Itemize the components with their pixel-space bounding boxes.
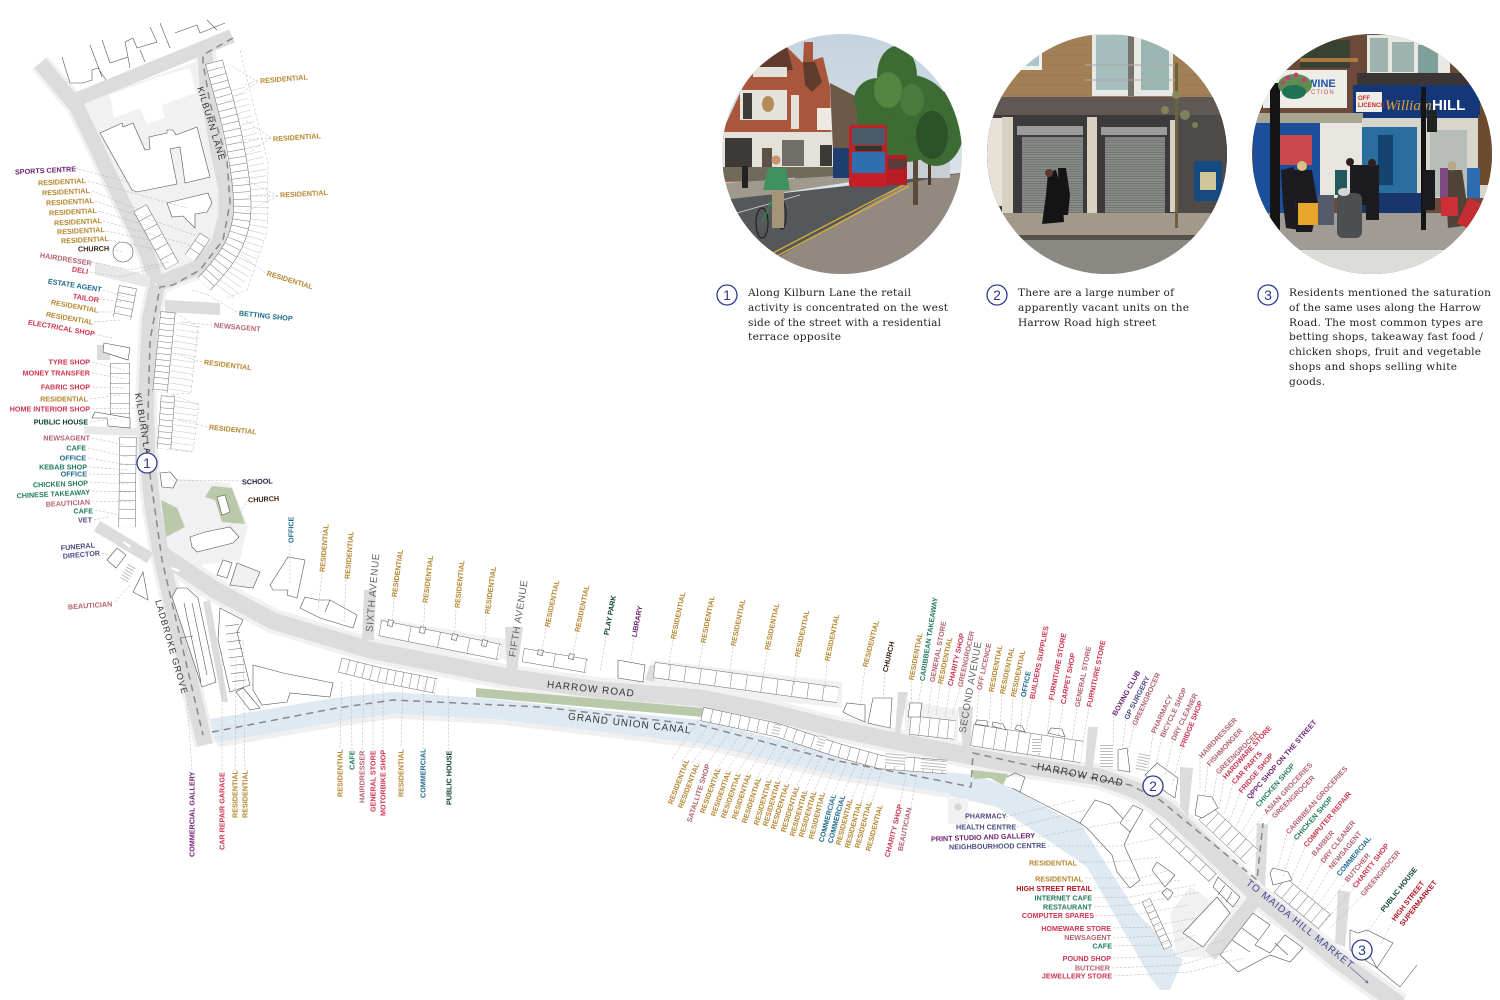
labels: Harrow Road north west: PLAY PARK: [602, 594, 618, 636]
labels: Harrow Road north west: RESIDENTIAL: [390, 548, 405, 598]
labels: Kilburn Lane west: RESIDENTIAL: [38, 176, 87, 187]
labels: Maida Hill north side: CHARITY SHOP: [1350, 841, 1391, 890]
labels: Kilburn Lane west: NEWSAGENT: [43, 434, 91, 442]
labels: Kilburn Lane west: RESIDENTIAL: [50, 298, 100, 315]
labels: south of canal: RESIDENTIAL: [1035, 874, 1084, 884]
labels: Maida Hill north side: HARDWARE STORE: [1221, 724, 1274, 781]
labels: Harrow Road north west: RESIDENTIAL: [421, 554, 435, 604]
labels: Ladbroke Grove and Harrow Road south: MOTORBIKE SHOP: [378, 750, 388, 816]
labels: south of canal: [931, 812, 1112, 980]
labels: Maida Hill north side: FISHMONGER: [1205, 726, 1245, 768]
labels: canal side terrace: RESIDENTIAL: [698, 766, 723, 815]
caption 3: of the same uses along the Harrow: [1289, 302, 1481, 314]
caption 1: [717, 285, 949, 343]
labels: canal side terrace: RESIDENTIAL: [740, 775, 763, 824]
labels: Maida Hill north side: GREENGROCER: [1214, 729, 1261, 776]
street names: [133, 86, 1356, 972]
labels: Kilburn Lane east: SCHOOL: [242, 476, 273, 486]
labels: Maida Hill north side: FRIDGE SHOP: [1237, 751, 1275, 795]
map marker 1: 1: [143, 455, 151, 471]
photo 3: Harrow Road saturated shopfronts: LICENCE: [1358, 103, 1384, 109]
labels: Harrow Road north west: RESIDENTIAL: [343, 530, 356, 579]
labels: Harrow Road north west: RESIDENTIAL: [763, 602, 781, 651]
labels: south of canal: PRINT STUDIO AND GALLERY: [931, 831, 1035, 843]
labels: Ladbroke Grove and Harrow Road south: RESIDENTIAL: [230, 769, 240, 818]
labels: canal side terrace: RESIDENTIAL: [779, 784, 801, 833]
labels: Kilburn Lane west: TYRE SHOP: [48, 358, 90, 366]
labels: Maida Hill north side: BUTCHER: [1343, 851, 1373, 884]
pavements: [75, 62, 1217, 957]
photo 3: Harrow Road saturated shopfronts: WINE: [1307, 78, 1336, 90]
labels: Harrow Road north east: GP SURGERY: [1122, 674, 1152, 721]
labels: Ladbroke Grove and Harrow Road south: HAIRDRESSER: [358, 750, 366, 803]
labels: Ladbroke Grove and Harrow Road south: COMMERCIAL GALLERY: [188, 771, 196, 857]
road label: To Maida Hill Market: TO MAIDA HILL MARKET: [1244, 878, 1356, 972]
labels: Maida Hill north side: QPPC SHOP ON THE STREET: [1245, 718, 1319, 801]
buildings: junction, school and church: [92, 343, 357, 710]
labels: canal side terrace: RESIDENTIAL: [676, 761, 702, 810]
labels: canal side terrace: RESIDENTIAL: [752, 777, 774, 826]
caption number 1: 1: [723, 287, 731, 303]
labels: canal side terrace: SATALLITE SHOP: [685, 763, 712, 823]
labels: canal side terrace: RESIDENTIAL: [807, 791, 827, 840]
photo 2: vacant shop units: [987, 30, 1227, 280]
caption number 3: [1258, 285, 1278, 305]
pub building: [722, 42, 833, 182]
labels: Kilburn Lane west: RESIDENTIAL: [46, 196, 95, 207]
caption number 2: [987, 285, 1007, 305]
labels: south of canal: HOMEWARE STORE: [1041, 924, 1111, 933]
labels: Ladbroke Grove and Harrow Road south: RESIDENTIAL: [396, 748, 406, 797]
labels: Maida Hill north side: NEWSAGENT: [1327, 829, 1364, 871]
labels: Harrow Road north east: GENERAL STORE: [1073, 645, 1093, 708]
labels: Harrow Road north east: BOXING CLUB: [1110, 669, 1142, 717]
photo 3: Harrow Road saturated shopfronts: William: [1385, 98, 1432, 114]
red bus: [849, 125, 907, 187]
terraces along Kilburn Lane: [120, 62, 242, 527]
labels: Maida Hill north side: GREENGROCER: [1270, 773, 1317, 820]
labels: Kilburn Lane west: RESIDENTIAL: [40, 394, 89, 404]
labels: Kilburn Lane west: OFFICE: [61, 470, 87, 478]
map marker 3: 3: [1358, 942, 1366, 958]
labels: Kilburn Lane east: RESIDENTIAL: [273, 131, 322, 143]
labels: Maida Hill north side: COMPUTER REPAIR: [1302, 789, 1354, 849]
labels: Harrow Road north east: RESIDENTIAL: [936, 636, 954, 685]
labels: Kilburn Lane west: RESIDENTIAL: [57, 225, 106, 236]
labels: Maida Hill north side: PUBLIC HOUSE: [1378, 865, 1419, 914]
labels: Kilburn Lane west: FABRIC SHOP: [41, 382, 90, 392]
labels: Maida Hill north side: [1197, 715, 1439, 928]
labels: Harrow Road north east: FURNITURE STORE: [1047, 632, 1068, 701]
street tree: [854, 46, 964, 166]
labels: Harrow Road north east: CARIBBEAN TAKEAWAY: [918, 596, 940, 682]
labels: Ladbroke Grove and Harrow Road south: RESIDENTIAL: [336, 748, 344, 797]
labels: Harrow Road north east: FRIDGE SHOP: [1178, 699, 1205, 749]
labels: Kilburn Lane west: RESIDENTIAL: [42, 186, 91, 197]
labels: Kilburn Lane east: BETTING SHOP: [239, 309, 293, 323]
labels: Kilburn Lane east: [203, 72, 329, 504]
caption 3: goods.: [1289, 376, 1325, 388]
labels: Harrow Road north west: RESIDENTIAL: [729, 598, 747, 647]
buildings: Harrow Road north: [340, 628, 1082, 767]
labels: Kilburn Lane east: NEWSAGENT: [214, 321, 262, 334]
labels: canal side terrace: RESIDENTIAL: [853, 800, 874, 849]
labels: south of canal: NEWSAGENT: [1064, 933, 1112, 942]
photo 1: Kilburn Lane street scene: [722, 34, 964, 280]
labels: Kilburn Lane east: RESIDENTIAL: [203, 358, 253, 372]
labels: south of canal: HEALTH CENTRE: [956, 822, 1016, 832]
white plots inside the upper block: [110, 68, 196, 124]
photo 3: Harrow Road saturated shopfronts: [1252, 34, 1493, 280]
labels: Kilburn Lane west: OFFICE: [60, 454, 86, 462]
photo 3: Harrow Road saturated shopfronts: HILL: [1432, 97, 1465, 114]
labels: south of canal: BUTCHER: [1075, 964, 1111, 972]
caption number 3: 3: [1264, 287, 1272, 303]
road label: Harrow Road west: HARROW ROAD: [546, 680, 635, 700]
labels: canal side terrace: [666, 757, 914, 858]
labels: Ladbroke Grove and Harrow Road south: PUBLIC HOUSE: [444, 750, 454, 805]
labels: canal side terrace: RESIDENTIAL: [730, 771, 753, 820]
labels: Kilburn Lane west: RESIDENTIAL: [45, 310, 95, 327]
labels: Maida Hill north side: ASIAN GROCERIES: [1262, 760, 1314, 816]
labels: canal side terrace: BEAUTICIAN: [896, 807, 914, 852]
road label: Ladbroke Grove: LADBROKE GROVE: [153, 599, 190, 696]
labels: Ladbroke Grove and Harrow Road south: RESIDENTIAL: [240, 769, 250, 818]
labels: Kilburn Lane west: MONEY TRANSFER: [23, 368, 91, 378]
labels: Maida Hill north side: CHICKEN SHOP: [1292, 794, 1335, 842]
caption 3: Residents mentioned the saturation: [1289, 287, 1491, 299]
caption 2: There are a large number of: [1018, 287, 1175, 299]
labels: Harrow Road north east: GREENGROCER: [956, 629, 976, 688]
labels: canal side terrace: RESIDENTIAL: [761, 778, 783, 827]
green spaces: [161, 486, 1008, 785]
canal basin marker: [954, 803, 962, 811]
labels: Maida Hill north side: GREENGROCER: [1359, 848, 1403, 898]
labels: Harrow Road north east: GENERAL STORE: [928, 620, 948, 683]
caption 2: Harrow Road high street: [1018, 317, 1157, 329]
labels: Maida Hill north side: SUPERMARKET: [1397, 878, 1439, 928]
labels: south of canal: NEIGHBOURHOOD CENTRE: [949, 841, 1046, 851]
caption 3: betting shops, takeaway fast food /: [1289, 331, 1483, 343]
map marker 3: [1352, 940, 1372, 960]
caption 1: side of the street with a residential: [748, 317, 942, 329]
junction traffic islands: [123, 541, 180, 586]
labels: canal side terrace: RESIDENTIAL: [709, 769, 733, 817]
labels: canal side terrace: RESIDENTIAL: [769, 781, 791, 830]
labels: Kilburn Lane west: RESIDENTIAL: [49, 206, 98, 217]
road label: Kilburn Lane upper: KILBURN LANE: [195, 86, 227, 162]
labels: Kilburn Lane east: RESIDENTIAL: [280, 188, 329, 199]
road label: Second Avenue: SECOND AVENUE: [958, 640, 985, 734]
labels: canal side terrace: COMMERCIAL: [817, 792, 838, 843]
map marker 1: [137, 453, 157, 473]
labels: Maida Hill north side: HAIRDRESSER: [1197, 715, 1240, 760]
caption number 1: [717, 285, 737, 305]
labels: Kilburn Lane west: HOME INTERIOR SHOP: [10, 404, 90, 414]
labels: Harrow Road north east: RESIDENTIAL: [987, 644, 1005, 693]
labels: Harrow Road north west: CHURCH: [881, 641, 896, 673]
labels: Harrow Road north east: PHARMACY: [1149, 693, 1175, 735]
caption 1: activity is concentrated on the west: [748, 302, 949, 314]
labels: canal side terrace: COMMERCIAL: [826, 793, 847, 844]
labels: Harrow Road north east: CARPET SHOP: [1059, 652, 1077, 705]
labels: Kilburn Lane west: SPORTS CENTRE: [15, 164, 76, 176]
labels: Kilburn Lane west: FUNERAL: [60, 540, 96, 552]
labels: south of canal: HIGH STREET RETAIL: [1016, 884, 1093, 893]
buildings: Kilburn Lane north block: [62, 20, 225, 262]
labels: Harrow Road north east: OFFICE: [1019, 670, 1033, 698]
labels: Ladbroke Grove and Harrow Road south: [188, 748, 454, 857]
caption 2: [987, 285, 1189, 329]
labels: Harrow Road north west: RESIDENTIAL: [793, 609, 811, 658]
labels: Harrow Road north west: RESIDENTIAL: [543, 579, 561, 628]
terrace: Kilburn Lane east rear plots: [222, 50, 268, 298]
arrow: towards Maida Hill Market: [1350, 967, 1368, 983]
labels: Kilburn Lane west: ESTATE AGENT: [47, 277, 103, 294]
caption 1: terrace opposite: [748, 331, 841, 343]
labels: Maida Hill north side: BARBER: [1310, 828, 1337, 858]
labels: Harrow Road north west: RESIDENTIAL: [453, 559, 467, 608]
labels: Kilburn Lane west: CAFE: [73, 506, 93, 516]
caption number 2: 2: [993, 287, 1001, 303]
labels: Kilburn Lane west: [10, 164, 113, 611]
canal: Grand Union Canal water: [205, 692, 1183, 990]
caption 3: [1258, 285, 1491, 388]
labels: Ladbroke Grove and Harrow Road south: GENERAL STORE: [368, 750, 378, 812]
road label: Harrow Road east: HARROW ROAD: [1036, 762, 1125, 789]
labels: Kilburn Lane east: RESIDENTIAL: [260, 72, 309, 85]
cyclist: [756, 155, 790, 238]
map marker 2: [1143, 776, 1163, 796]
labels: Maida Hill north side: COMMERCIAL: [1335, 834, 1374, 878]
labels: Harrow Road north east: BUILDERS SUPPLIES: [1028, 625, 1051, 700]
labels: canal side terrace: RESIDENTIAL: [797, 789, 819, 838]
labels: Kilburn Lane west: DELI: [71, 265, 89, 276]
labels: Kilburn Lane west: CHICKEN SHOP: [33, 478, 88, 489]
caption 3: Road. The most common types are: [1289, 317, 1483, 329]
labels: Kilburn Lane west: TAILOR: [72, 292, 100, 305]
labels: Harrow Road north east: FURNITURE STORE: [1085, 639, 1108, 708]
labels: south of canal: INTERNET CAFE: [1034, 894, 1092, 902]
buildings: Harrow Road rear extensions and blocks: [387, 620, 1178, 823]
labels: Harrow Road north west: RESIDENTIAL: [699, 595, 717, 644]
labels: Kilburn Lane west: HAIRDRESSER: [39, 251, 93, 268]
labels: Kilburn Lane west: RESIDENTIAL: [54, 216, 103, 227]
buildings: south of Harrow Road and Maida Hill: [1146, 813, 1325, 948]
road label: Kilburn Lane lower: KILBURN LANE: [133, 392, 155, 470]
labels: Harrow Road north west: [286, 516, 896, 673]
labels: Harrow Road north west: RESIDENTIAL: [861, 619, 881, 668]
labels: Harrow Road north east: [907, 596, 1205, 749]
labels: Harrow Road north east: CHARITY SHOP: [946, 632, 967, 687]
labels: Kilburn Lane west: RESIDENTIAL: [61, 234, 110, 245]
labels: canal side terrace: RESIDENTIAL: [666, 757, 692, 806]
labels: Harrow Road north east: OFF LICENCE: [975, 642, 993, 691]
caption 3: chicken shops, fruit and vegetable: [1289, 346, 1481, 358]
road centre dashes: [147, 38, 1263, 880]
labels: Kilburn Lane east: RESIDENTIAL: [266, 269, 315, 291]
labels: south of canal: PHARMACY: [965, 812, 1007, 820]
road label: Grand Union Canal: GRAND UNION CANAL: [567, 712, 692, 737]
labels: south of canal: COMPUTER SPARES: [1022, 911, 1094, 920]
labels: Maida Hill north side: DRY CLEANER: [1318, 818, 1358, 865]
labels: Kilburn Lane east: RESIDENTIAL: [209, 423, 258, 437]
labels: Harrow Road north west: OFFICE: [286, 516, 296, 543]
labels: Ladbroke Grove and Harrow Road south: COMMERCIAL: [418, 748, 428, 798]
caption 2: apparently vacant units on the: [1018, 302, 1189, 314]
labels: canal side terrace: CHARITY SHOP: [883, 803, 905, 858]
labels: Maida Hill north side: CAR PARTS: [1230, 749, 1264, 786]
labels: Harrow Road north east: RESIDENTIAL: [1009, 649, 1027, 698]
labels: Harrow Road north west: RESIDENTIAL: [573, 584, 591, 633]
labels: canal side terrace: RESIDENTIAL: [788, 788, 810, 837]
labels: Ladbroke Grove and Harrow Road south: CAR REPAIR GARAGE: [218, 772, 226, 850]
labels: Harrow Road north east: RESIDENTIAL: [907, 632, 925, 681]
labels: south of canal: RESTAURANT: [1043, 902, 1093, 912]
labels: Maida Hill north side: HIGH STREET: [1389, 879, 1427, 923]
labels: canal side terrace: RESIDENTIAL: [864, 803, 885, 852]
labels: Kilburn Lane west: ELECTRICAL SHOP: [27, 318, 96, 338]
road label: Sixth Avenue: SIXTH AVENUE: [365, 553, 382, 632]
labels: Kilburn Lane west: KEBAB SHOP: [39, 462, 87, 472]
labels: Kilburn Lane east: CHURCH: [248, 494, 279, 504]
labels: Kilburn Lane west: DIRECTOR: [62, 548, 101, 561]
labels: Ladbroke Grove and Harrow Road south: CAFE: [348, 750, 356, 770]
labels: Harrow Road north west: RESIDENTIAL: [823, 613, 841, 662]
labels: Kilburn Lane west: BEAUTICIAN: [68, 599, 113, 611]
labels: Kilburn Lane west: CAFE: [66, 444, 86, 452]
labels: canal side terrace: RESIDENTIAL: [834, 797, 855, 846]
labels: Harrow Road north west: RESIDENTIAL: [669, 591, 687, 640]
labels: south of canal: POUND SHOP: [1063, 954, 1111, 963]
labels: Kilburn Lane west: BEAUTICIAN: [45, 498, 90, 509]
labels: canal side terrace: RESIDENTIAL: [843, 800, 864, 849]
labels: Kilburn Lane west: CHURCH: [78, 244, 109, 253]
labels: south of canal: RESIDENTIAL: [1029, 858, 1078, 868]
photo 3: Harrow Road saturated shopfronts: OFF: [1358, 96, 1370, 102]
labels: Kilburn Lane west: VET: [78, 516, 93, 524]
labels: canal side terrace: RESIDENTIAL: [719, 771, 743, 819]
photo 3: Harrow Road saturated shopfronts: CTION: [1311, 90, 1335, 96]
labels: Harrow Road north east: BICYCLE SHOP: [1158, 686, 1189, 739]
buildings: south block outlines: [1080, 795, 1417, 987]
labels: Maida Hill north side: CHICKEN SHOP: [1254, 761, 1297, 809]
labels: Harrow Road north east: RESIDENTIAL: [998, 646, 1016, 695]
road label: Fifth Avenue: FIFTH AVENUE: [508, 579, 531, 658]
labels: Kilburn Lane west: PUBLIC HOUSE: [34, 418, 88, 426]
labels: Harrow Road north west: RESIDENTIAL: [483, 565, 498, 615]
map marker 2: 2: [1149, 778, 1157, 794]
labels: Maida Hill north side: CARIBBEAN GROCERIES: [1284, 764, 1350, 836]
labels: south of canal: CAFE: [1092, 942, 1112, 950]
labels: Harrow Road north west: RESIDENTIAL: [318, 523, 331, 572]
labels: Harrow Road north west: LIBRARY: [630, 605, 645, 638]
labels: Kilburn Lane west: CHINESE TAKEAWAY: [16, 487, 90, 500]
labels: Harrow Road north east: GREENGROCER: [1130, 671, 1163, 727]
labels: south of canal: JEWELLERY STORE: [1042, 972, 1112, 980]
labels: Harrow Road north east: DRY CLEANER: [1169, 691, 1200, 742]
caption 3: shops and shops selling white: [1289, 361, 1457, 373]
caption 1: Along Kilburn Lane the retail: [747, 287, 912, 299]
